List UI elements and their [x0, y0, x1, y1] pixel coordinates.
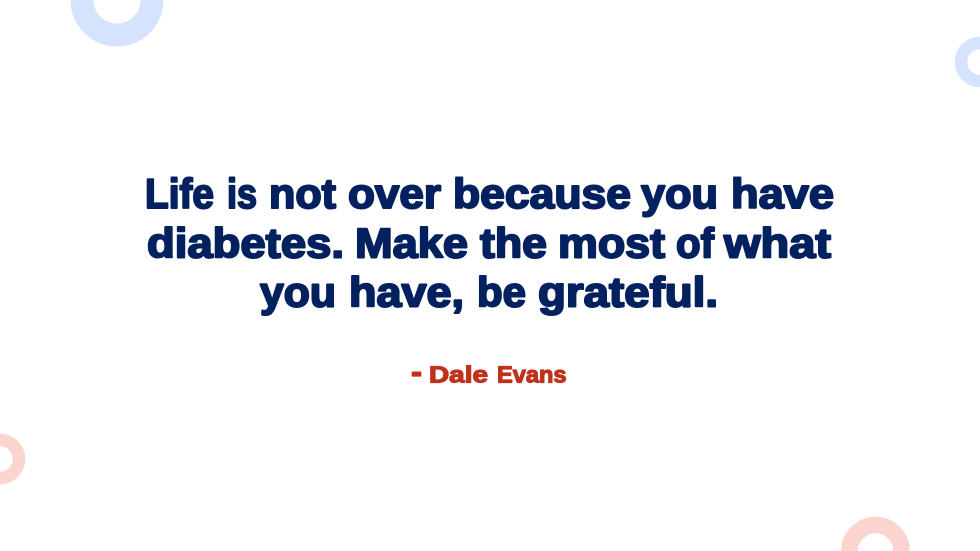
quote text: Make — [355, 220, 468, 266]
quote text: most — [558, 220, 665, 266]
quote text: what — [723, 220, 831, 266]
quote text — [145, 170, 834, 316]
quote text: the — [480, 220, 547, 266]
quote text: of — [676, 220, 715, 266]
ring: bottom right — [850, 525, 902, 551]
quote text: over — [348, 170, 441, 217]
attribution: Dale — [429, 362, 488, 388]
attribution: Evans — [497, 362, 566, 388]
quote text: diabetes. — [147, 220, 344, 266]
ring: top left — [82, 0, 152, 35]
quote text: have, — [349, 268, 464, 316]
quote text: because — [453, 170, 631, 217]
attribution: - — [411, 354, 422, 390]
quote text: be — [477, 268, 526, 316]
quote text: you — [641, 170, 718, 217]
quote text: have — [731, 170, 834, 217]
ring: bottom left — [0, 440, 19, 478]
quote text: not — [269, 170, 336, 217]
quote text: you — [260, 268, 336, 316]
attribution — [411, 354, 566, 390]
ring: top right — [961, 43, 980, 81]
quote text: Life — [145, 170, 214, 217]
quote text: is — [227, 170, 257, 217]
quote text: grateful. — [538, 268, 718, 316]
